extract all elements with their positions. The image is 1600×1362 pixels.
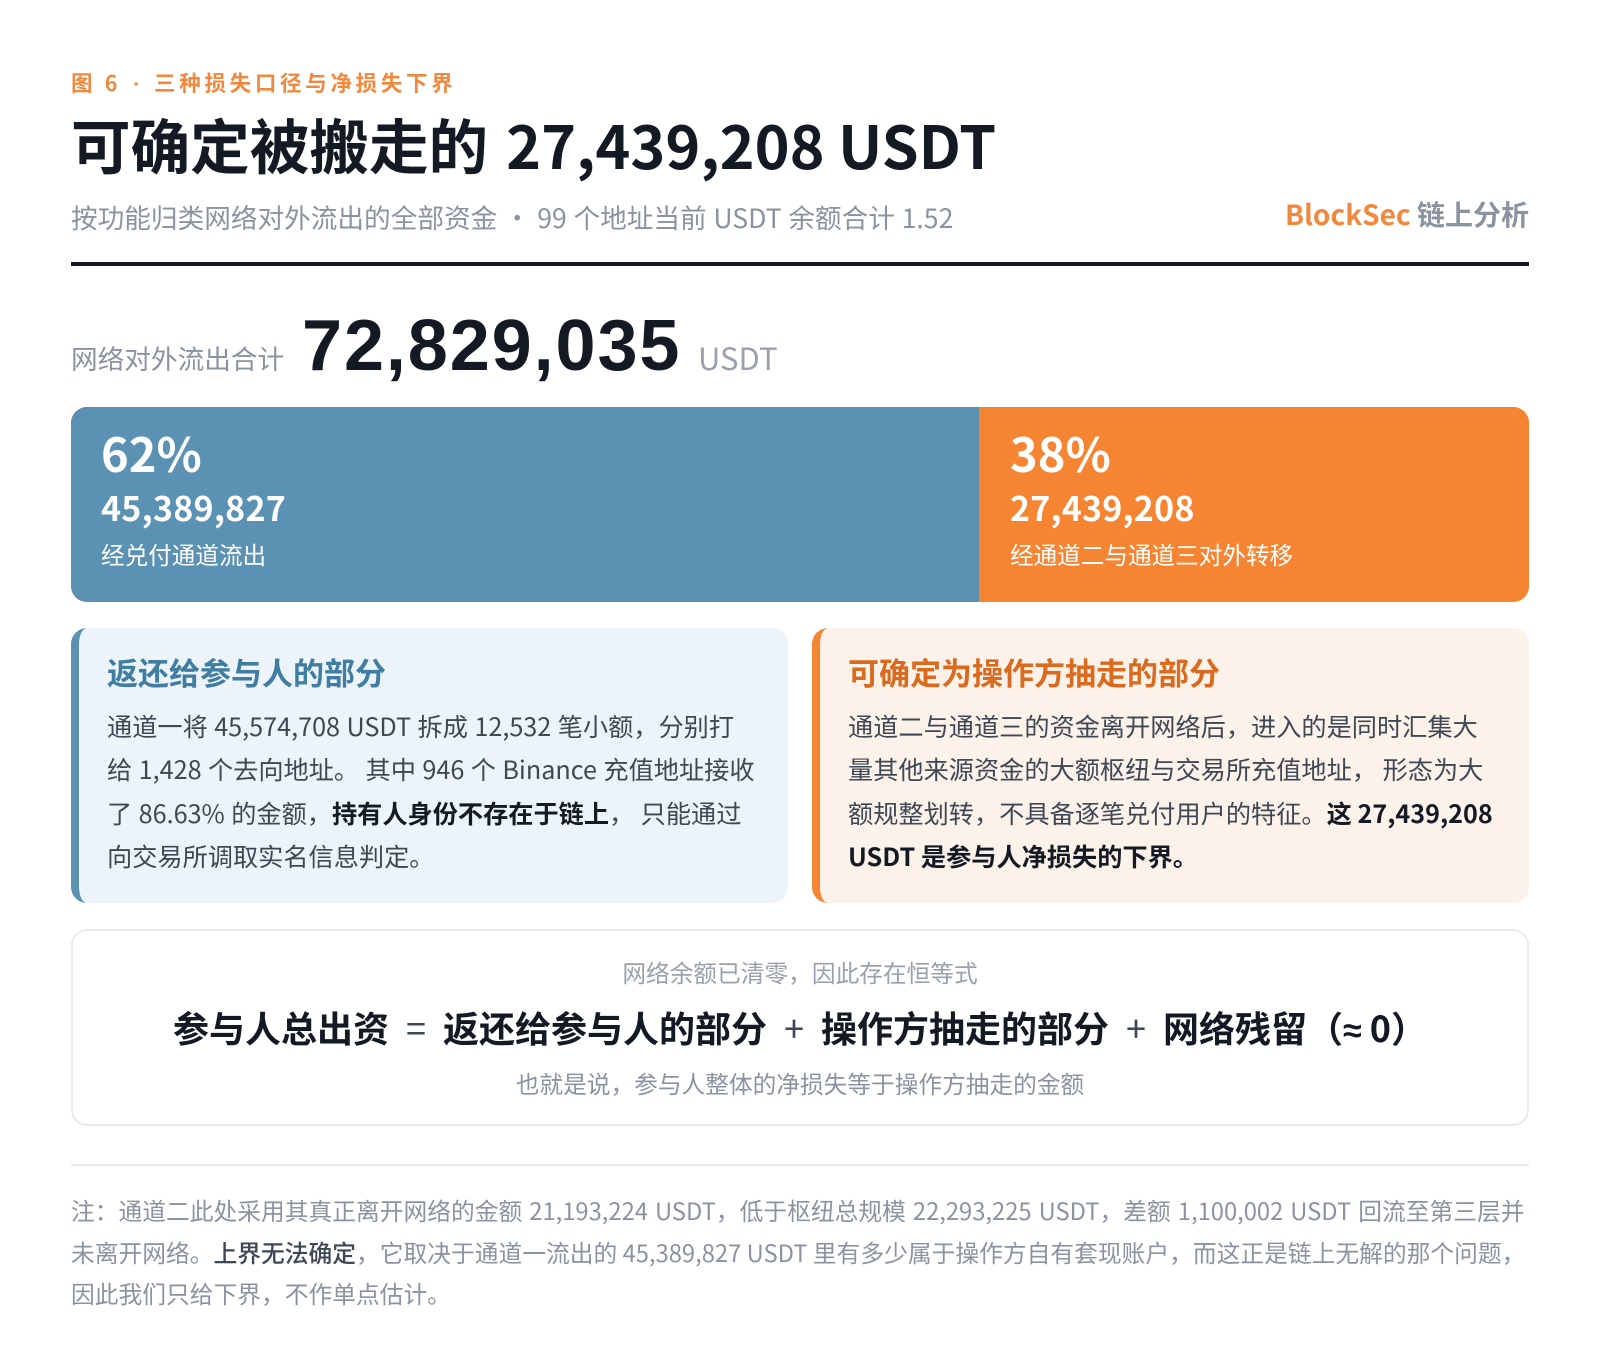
- equation: 参与人总出资 = 返还给参与人的部分 + 操作方抽走的部分 + 网络残留（≈ 0）: [173, 1001, 1427, 1053]
- footnote: 注：通道二此处采用其真正离开网络的金额 21,193,224 USDT，低于枢纽总规模 22,293,225 USDT，差额 1,100,002 USDT 回流至第三层并: [71, 1192, 1525, 1227]
- panel heading: 可确定为操作方抽走的部分: [848, 649, 1220, 694]
- segment: 62% payout channel: [71, 407, 979, 602]
- title: 可确定被搬走的 27,439,208 USDT: [71, 101, 996, 187]
- panel: returned to participants: [71, 628, 788, 903]
- total label: 网络对外流出合计: [71, 338, 284, 377]
- percent: 38%: [1010, 417, 1111, 486]
- equation intro: 网络余额已清零，因此存在恒等式: [622, 955, 978, 989]
- panel body text: 通道二与通道三的资金离开网络后，进入的是同时汇集大: [848, 708, 1478, 744]
- amount: 45,389,827: [101, 482, 286, 531]
- description: 经通道二与通道三对外转移: [1010, 537, 1293, 571]
- panel: taken by operator: [812, 628, 1529, 903]
- panel body text: 量其他来源资金的大额枢纽与交易所充值地址， 形态为大: [848, 751, 1483, 787]
- description: 经兑付通道流出: [101, 537, 266, 571]
- footnote: 未离开网络。上界无法确定，它取决于通道一流出的 45,389,827 USDT 里有多少属于操作方自有套现账户，而这正是链上无解的那个问题，: [71, 1234, 1525, 1269]
- panel body text: [848, 708, 1493, 874]
- footnote divider: [71, 1164, 1529, 1166]
- panel body text: 通道一将 45,574,708 USDT 拆成 12,532 笔小额，分别打: [107, 708, 734, 744]
- panel body text: 给 1,428 个去向地址。 其中 946 个 Binance 充值地址接收: [107, 751, 755, 787]
- percent: 62%: [101, 417, 202, 486]
- total unit: USDT: [698, 334, 778, 379]
- footnote: [71, 1192, 1525, 1310]
- panel body text: 额规整划转，不具备逐笔兑付用户的特征。这 27,439,208: [848, 795, 1493, 831]
- panel body text: USDT 是参与人净损失的下界。: [848, 838, 1198, 874]
- segment: 38% outbound: [979, 407, 1529, 602]
- amount: 27,439,208: [1010, 482, 1195, 531]
- header rule: [71, 262, 1529, 266]
- kicker label: 图 6 · 三种损失口径与净损失下界: [71, 67, 456, 98]
- stacked bar: [71, 407, 1529, 602]
- brand mark: BlockSec 链上分析: [1285, 194, 1529, 234]
- panel body text: [107, 708, 755, 874]
- panel heading: 返还给参与人的部分: [107, 649, 386, 694]
- total value: 72,829,035: [302, 306, 681, 386]
- footnote: 因此我们只给下界，不作单点估计。: [71, 1275, 451, 1310]
- subtitle: 按功能归类网络对外流出的全部资金 · 99 个地址当前 USDT 余额合计 1.52: [71, 197, 953, 236]
- panel: identity equation: [71, 929, 1529, 1126]
- equation conclusion: 也就是说，参与人整体的净损失等于操作方抽走的金额: [516, 1066, 1084, 1100]
- panel body text: 向交易所调取实名信息判定。: [107, 838, 434, 874]
- panel body text: 了 86.63% 的金额，持有人身份不存在于链上， 只能通过: [107, 795, 741, 831]
